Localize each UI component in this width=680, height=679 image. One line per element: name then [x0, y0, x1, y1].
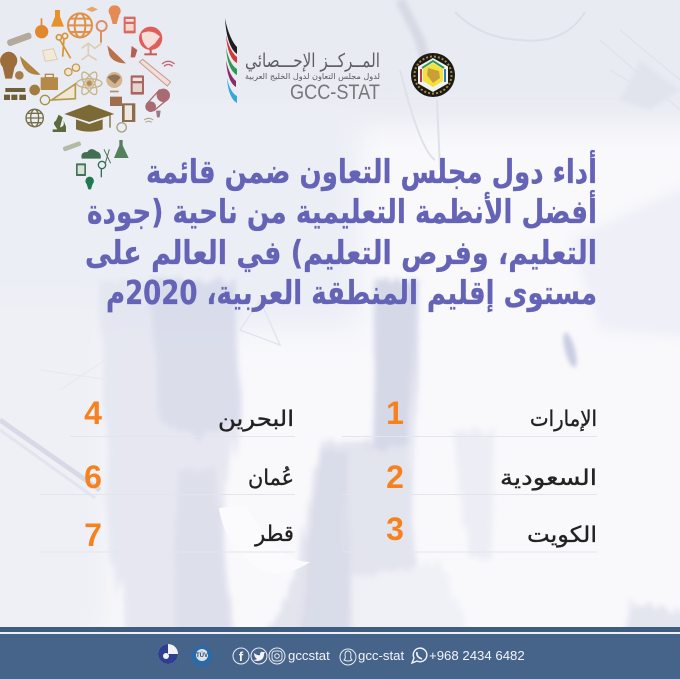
icon: globe orange	[68, 13, 92, 37]
icon: certificate badge	[158, 644, 178, 664]
row: Kuwait: الكويت	[527, 523, 597, 548]
icon: globe green	[26, 109, 43, 127]
icon: wifi	[162, 61, 175, 66]
title	[85, 150, 597, 313]
footer bar	[0, 627, 680, 679]
icon: TUV badge: TÜV	[196, 652, 208, 659]
row: Saudi Arabia	[342, 459, 597, 495]
icon: instagram	[269, 648, 285, 664]
handle: gccstat: gccstat	[288, 648, 330, 663]
icon: small cap top	[86, 7, 98, 12]
icon: network boxes	[4, 88, 26, 100]
icon: wifi small	[144, 118, 153, 122]
icon: facebook	[233, 648, 249, 664]
icon: twitter	[251, 648, 267, 664]
row: Kuwait	[342, 511, 597, 552]
icon: calculator green	[76, 163, 86, 176]
row: Saudi Arabia: 2	[386, 459, 404, 495]
logo: Arabic subtitle: لدول مجلس التعاون لدول الخليج العربية	[245, 72, 380, 81]
icon: glasses lower	[62, 141, 82, 152]
ranking table	[40, 395, 597, 553]
icon: cube	[43, 49, 57, 61]
icon: flask green	[114, 140, 129, 158]
icon: facebook: f	[239, 649, 244, 664]
phone number: +968 2434 6482	[429, 648, 525, 663]
row: Oman: 6	[84, 459, 102, 495]
icon: bulb brown	[0, 52, 17, 79]
row: UAE	[342, 395, 597, 436]
icon: glasses	[6, 32, 32, 47]
row: UAE: الإمارات	[530, 407, 597, 432]
logo: Arabic name: المــركــز الإحـــصائي	[245, 50, 380, 72]
white brush tail	[219, 505, 310, 573]
icon: protractor left	[20, 56, 41, 75]
row: Qatar	[40, 517, 295, 553]
row: Qatar: 7	[84, 517, 102, 553]
icon: notebook	[122, 103, 135, 122]
icon: ring	[40, 95, 50, 105]
row: Qatar: قطر	[254, 522, 294, 547]
row: Oman: عُمان	[248, 466, 294, 491]
icon: globe red	[139, 27, 162, 55]
row: Kuwait: 3	[386, 511, 404, 547]
icon: graduation cap	[64, 105, 114, 132]
logo: GCC-STAT ribbon	[225, 18, 237, 103]
icon: calculator right	[131, 75, 144, 95]
icon: briefcase	[41, 74, 58, 90]
row: Bahrain: 4	[84, 395, 102, 431]
icon: microscope small	[131, 46, 137, 57]
row: Oman	[40, 459, 295, 495]
icon: gear	[29, 85, 40, 95]
row: Bahrain	[70, 395, 295, 436]
icon: magnifier	[97, 21, 107, 43]
icon: cloud	[81, 149, 101, 159]
icon: atom	[77, 70, 102, 97]
icon: calculator	[124, 17, 136, 33]
row: UAE: 1	[386, 395, 404, 431]
icon: molecule	[82, 43, 102, 60]
icon: snapchat	[340, 649, 356, 665]
logo: GCC-STAT wordmark: GCC-STAT	[290, 81, 380, 104]
icon: capsule	[15, 71, 24, 80]
icon: small briefcase	[110, 97, 122, 106]
icon: apple	[35, 18, 48, 38]
row: Bahrain: البحرين	[218, 407, 294, 432]
icon: clip	[117, 123, 126, 132]
icon: pills	[65, 64, 80, 76]
icon: bulb green	[85, 177, 94, 189]
icon: whatsapp	[412, 648, 427, 663]
icon cluster: education	[0, 5, 175, 189]
icon: bulb	[109, 5, 121, 24]
icon: small globe on stand	[106, 72, 122, 92]
icon: pin	[156, 111, 161, 117]
row: Saudi Arabia: السعودية	[500, 466, 597, 491]
icon: TUV badge	[192, 646, 212, 666]
emblem: GCC seal	[411, 53, 455, 97]
icon: gears	[145, 89, 170, 112]
handle: gcc-stat: gcc-stat	[358, 648, 405, 663]
icon: scissors green	[104, 149, 111, 163]
icon: scissors	[56, 33, 71, 58]
icon: flask top	[51, 10, 64, 27]
icon: ruler	[139, 59, 171, 86]
icon: magnifier green	[98, 161, 106, 177]
icon: protractor right	[107, 45, 126, 63]
icon: triangle ruler	[52, 84, 75, 100]
icon: microscope	[53, 115, 66, 132]
